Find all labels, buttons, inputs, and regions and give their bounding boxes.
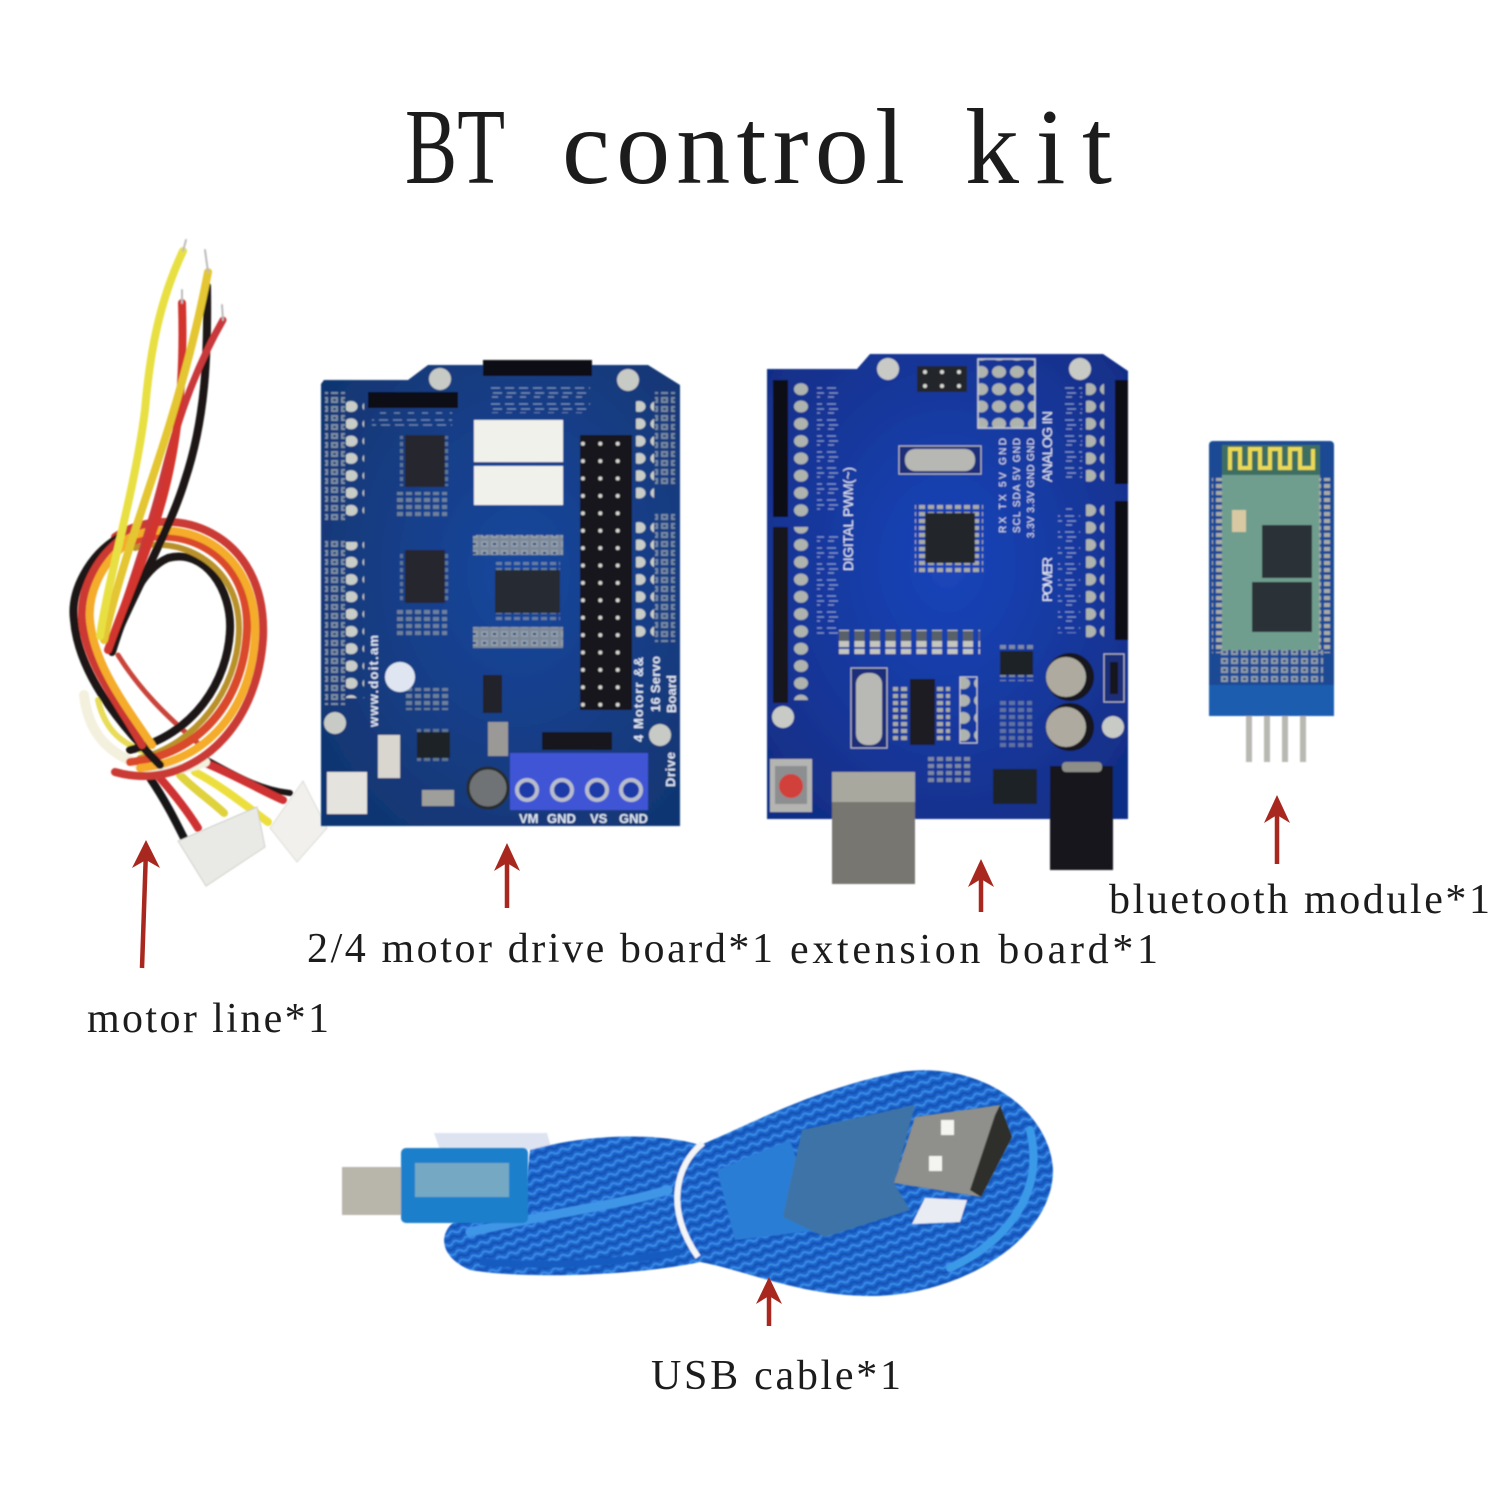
highlight strand [470,1190,668,1232]
left dense pin strip [325,392,345,520]
arrow: motor drive board [494,843,520,908]
pin block [960,677,977,743]
loop: outer red [115,522,263,776]
mounting holes [772,358,1124,738]
white tie [677,1143,703,1257]
arrow: USB cable [756,1277,782,1326]
so8 chip [417,726,450,762]
board labels: 16 Servo [648,656,663,712]
right headers [1115,380,1128,484]
board labels [366,635,679,826]
title: kit [965,88,1112,207]
loop: olive [135,545,239,758]
title: BT [405,88,505,207]
silk pin numbers [817,384,841,510]
large crystal [851,668,887,748]
so8 [1000,645,1033,681]
label: motor line: motor line*1 [87,996,329,1042]
white connectors [474,420,563,462]
panel: motor drive board [321,360,680,826]
mounting holes [324,368,671,746]
tails to connectors [150,760,290,838]
dc jack [1050,766,1113,870]
silk top [490,385,590,413]
panel: extension board: 3.3V 3.3V GND GND [1026,438,1037,538]
board labels [840,411,1055,602]
icon: wire connectors [178,781,327,886]
icon: USB B plug [342,1148,528,1223]
capacitor [468,768,508,808]
icsp pins [923,370,961,388]
small cap [488,722,508,756]
ICSP [917,366,967,392]
panel: bluetooth module [1209,441,1334,762]
smd rows [473,535,563,555]
title: control [562,88,905,207]
left band descending [73,538,160,765]
arrow: extension board [968,859,994,912]
reset button [378,735,400,778]
concentric loop: black inner [112,557,230,750]
jumper chip [1104,654,1124,702]
upright strands [110,286,207,650]
board labels: DIGITAL PWM(~) [840,467,856,571]
power switch [327,772,367,814]
loop: yellow-orange [115,530,255,768]
board labels: VM [519,811,538,826]
usb chip [893,685,950,743]
servo pin header [580,435,632,710]
board labels: VS [590,811,608,826]
title [405,88,1112,207]
module pins [1246,716,1306,762]
label: bluetooth module: bluetooth module*1 [1109,877,1490,923]
board labels: POWER [1039,557,1055,602]
label: extension board: extension board*1 [790,927,1158,973]
board labels: ANALOG IN [1039,411,1055,482]
loop: red-orange [125,536,247,762]
hole block [978,359,1035,428]
icon: USB A plug [717,1105,1012,1240]
arrow: motor line [132,840,160,968]
left diagonal strand running under the loop [118,655,200,745]
mosfet [483,675,502,713]
left headers [773,380,788,517]
resistors row [838,630,980,654]
white lower strand [84,695,205,770]
label: USB cable: USB cable*1 [651,1353,901,1399]
centre chip [495,562,560,620]
usb b socket [832,772,915,884]
panel: extension board: RX TX 5V GND [998,438,1009,533]
board labels: GND [619,811,648,826]
logo [385,662,415,692]
label: motor drive board: 2/4 motor drive board*1 [307,926,773,972]
small parts [925,755,970,785]
regulator [993,769,1037,804]
right dense strip [655,392,675,487]
left pin holes [346,396,364,518]
icon: motor line wire bundle [73,240,290,838]
right pin holes [636,396,654,500]
board labels: GND [547,811,576,826]
panel: extension board: SCL SDA 5V GND [1012,438,1023,533]
board labels: Board [664,675,679,713]
holes [793,379,811,517]
reset [770,759,812,812]
motor chips [400,436,450,486]
panel: extension board [767,354,1128,884]
board labels: www.doit.am [366,635,381,728]
blue terminal [510,753,648,810]
board labels: 4 Motorr && [631,657,646,742]
capacitors [1046,653,1094,701]
mcu pins [915,503,983,573]
gap [912,1198,967,1224]
top headers [483,360,592,376]
arrow: bluetooth module [1264,795,1290,864]
icon: USB cable [434,1070,1053,1296]
crystal [899,446,981,474]
board labels: Drive [663,752,678,787]
jumper [542,732,612,750]
